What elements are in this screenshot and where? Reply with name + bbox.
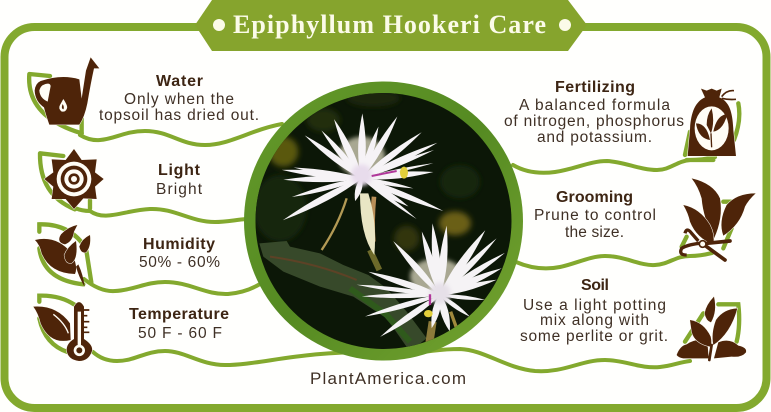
care item: light — [156, 162, 203, 198]
care item: soil: Soil — [581, 277, 609, 294]
photo background — [256, 93, 512, 349]
care item: fertilizing — [504, 79, 684, 146]
connector waves — [75, 124, 715, 371]
care item: grooming — [534, 189, 656, 241]
upper flower — [281, 113, 444, 223]
care item: humidity — [139, 236, 220, 271]
care item: light: Bright — [156, 181, 203, 198]
care item: soil: Use a light potting — [523, 297, 666, 314]
care item: soil: some perlite or grit. — [520, 328, 668, 345]
care item: water: Only when the — [124, 91, 234, 108]
lower flower — [356, 223, 507, 339]
central photo: night-blooming epiphyllum flowers — [244, 82, 523, 360]
care item: fertilizing: A balanced formula — [519, 97, 670, 114]
care item: fertilizing: of nitrogen, phosphorus — [504, 113, 684, 130]
care item: water: Water — [156, 73, 203, 90]
care item: fertilizing: Fertilizing — [555, 79, 635, 96]
title banner: Epiphyllum Hookeri Care — [233, 10, 546, 39]
title banner — [195, 0, 587, 51]
icon: grooming leaves and scissors — [681, 178, 756, 260]
icon: soil and sprout — [677, 297, 746, 360]
icon: humidity leaf and droplets — [35, 224, 91, 287]
icon: thermometer and leaf — [33, 296, 92, 361]
right column icons — [685, 89, 739, 160]
care item: grooming: Prune to control — [534, 207, 656, 224]
cactus leaf — [259, 241, 427, 352]
care item: temperature — [129, 306, 229, 342]
icon: fertilizer bag — [685, 89, 739, 160]
flower stems — [322, 198, 347, 250]
icon: watering can with leaf — [29, 57, 99, 133]
care item: humidity: Humidity — [143, 236, 215, 253]
care item: soil — [520, 277, 668, 345]
icon: sun in leaf — [40, 149, 104, 209]
photo ring — [244, 82, 523, 360]
care item: grooming: the size. — [565, 224, 624, 241]
care item: water: topsoil has dried out. — [99, 107, 259, 124]
care item: fertilizing: and potassium. — [537, 129, 652, 146]
care item: temperature: 50 F - 60 F — [138, 325, 222, 342]
care item: humidity: 50% - 60% — [139, 254, 220, 271]
care item: light: Light — [158, 162, 201, 179]
care item: soil: mix along with — [540, 312, 649, 329]
care item: temperature: Temperature — [129, 306, 229, 323]
care item: water — [99, 73, 259, 124]
website credit: PlantAmerica.com — [310, 369, 466, 388]
left column icons — [29, 57, 104, 209]
care item: grooming: Grooming — [556, 189, 633, 206]
